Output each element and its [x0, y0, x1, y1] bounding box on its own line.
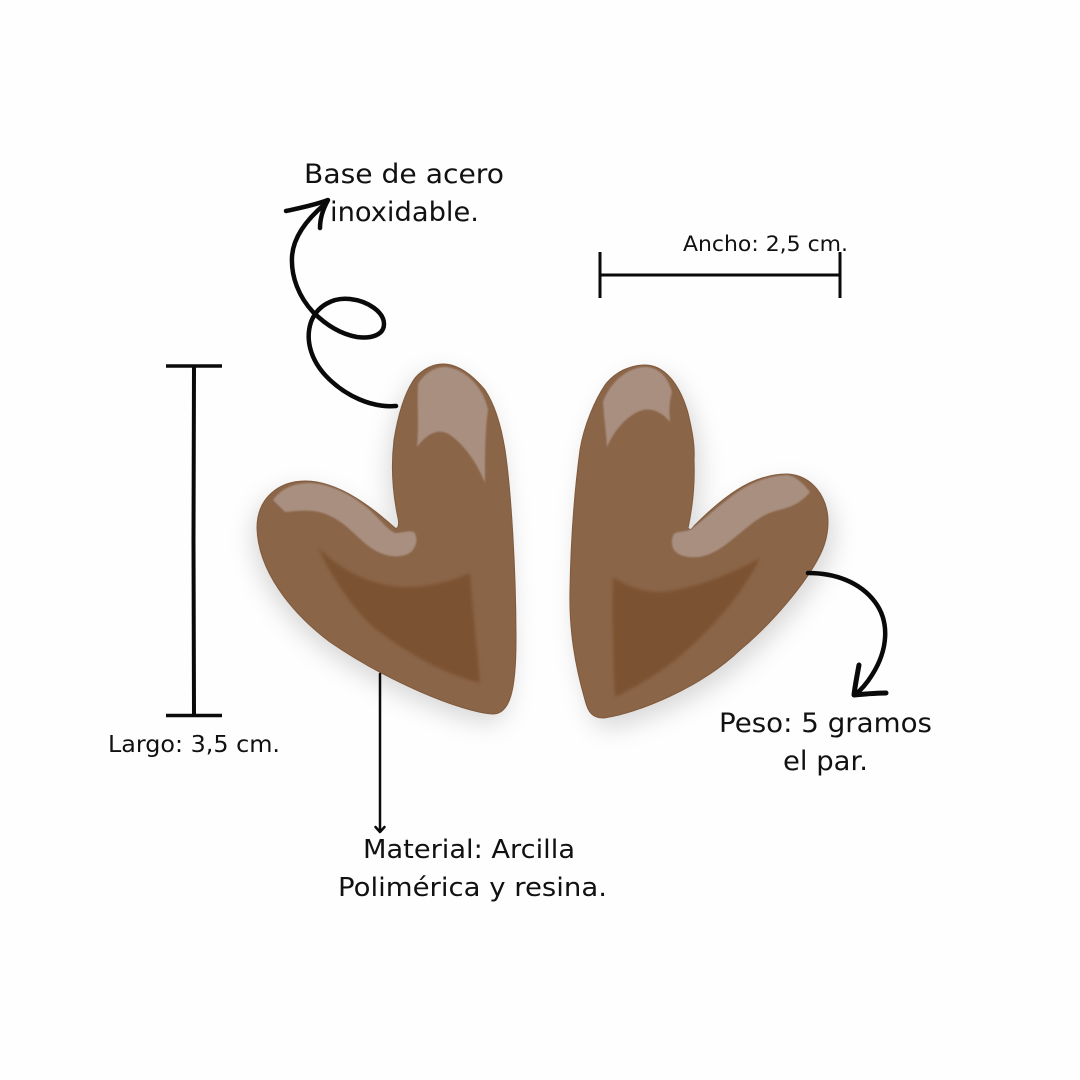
left heart earring [253, 364, 516, 723]
label: material: Material: Arcilla [363, 835, 575, 865]
label: material [338, 835, 607, 903]
left heart dark reflection [318, 547, 480, 683]
label: base de acero inoxidable: inoxidable. [330, 197, 479, 228]
length dimension bracket [166, 366, 222, 716]
label: base de acero inoxidable: Base de acero [304, 159, 504, 190]
material arrow [376, 674, 384, 832]
squiggle arrow to base label [286, 200, 396, 406]
right heart lobe highlight [672, 475, 810, 557]
left heart lobe highlight [273, 483, 416, 556]
label: peso [719, 708, 932, 777]
left heart body [257, 364, 516, 714]
label: ancho: Ancho: 2,5 cm. [683, 232, 848, 256]
right heart body [570, 365, 828, 718]
width dimension bracket [600, 252, 840, 298]
left heart top highlight [417, 367, 488, 483]
right heart earring [570, 365, 834, 728]
label: base de acero inoxidable [304, 159, 504, 228]
label: peso: Peso: 5 gramos [719, 708, 932, 739]
label: material: Polimérica y resina. [338, 873, 607, 903]
right heart dark reflection [613, 558, 760, 697]
weight arrow [808, 573, 886, 695]
label: peso: el par. [783, 746, 868, 777]
label: largo: Largo: 3,5 cm. [108, 732, 280, 758]
right heart top highlight [603, 367, 672, 447]
